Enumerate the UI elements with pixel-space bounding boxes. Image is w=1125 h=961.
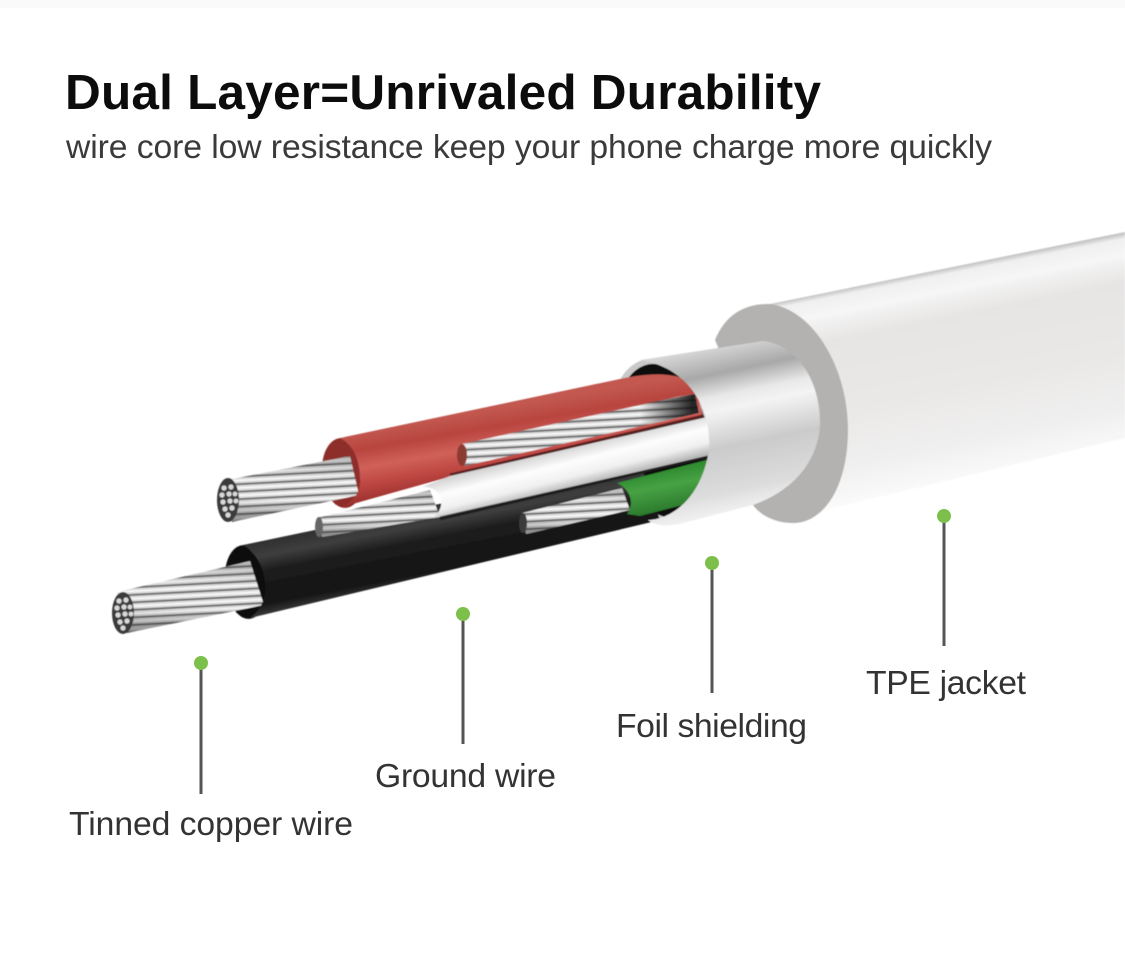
green wire (519, 458, 714, 534)
callout: ground wire (375, 607, 556, 795)
green wire strands (519, 488, 630, 534)
red wire front face (319, 436, 367, 510)
title: Dual Layer=Unrivaled Durability (65, 65, 821, 120)
red wire insulation (340, 374, 703, 507)
callout: tinned copper wire (69, 656, 353, 843)
black wire front face (221, 543, 271, 621)
white wire lower shadow (440, 456, 712, 519)
callout: foil shielding (616, 556, 807, 745)
red wire front strands (217, 456, 359, 522)
callout: TPE jacket (866, 509, 1027, 702)
red wire rear strands (457, 394, 699, 466)
white wire strands (315, 490, 440, 537)
green wire insulation (617, 458, 714, 516)
red wire (217, 374, 703, 522)
black wire strands (112, 561, 264, 634)
black wire (112, 462, 660, 634)
TPE jacket body (760, 232, 1125, 523)
white wire (315, 417, 712, 537)
foil opening rim (596, 350, 726, 532)
callout: TPE jacket: TPE jacket (866, 664, 1027, 702)
foil shielding (640, 341, 820, 525)
callout: foil shielding: Foil shielding (616, 707, 807, 745)
foil opening interior (603, 356, 723, 526)
subtitle: wire core low resistance keep your phone charge more quickly (65, 128, 992, 166)
red wire lower dark edge (450, 416, 703, 475)
black wire insulation (243, 462, 660, 618)
TPE jacket cut face (715, 304, 848, 523)
callout: tinned copper wire: Tinned copper wire (69, 805, 353, 843)
callout: ground wire: Ground wire (375, 757, 556, 795)
cable cross-section illustration (112, 232, 1125, 634)
white wire insulation (422, 417, 712, 518)
